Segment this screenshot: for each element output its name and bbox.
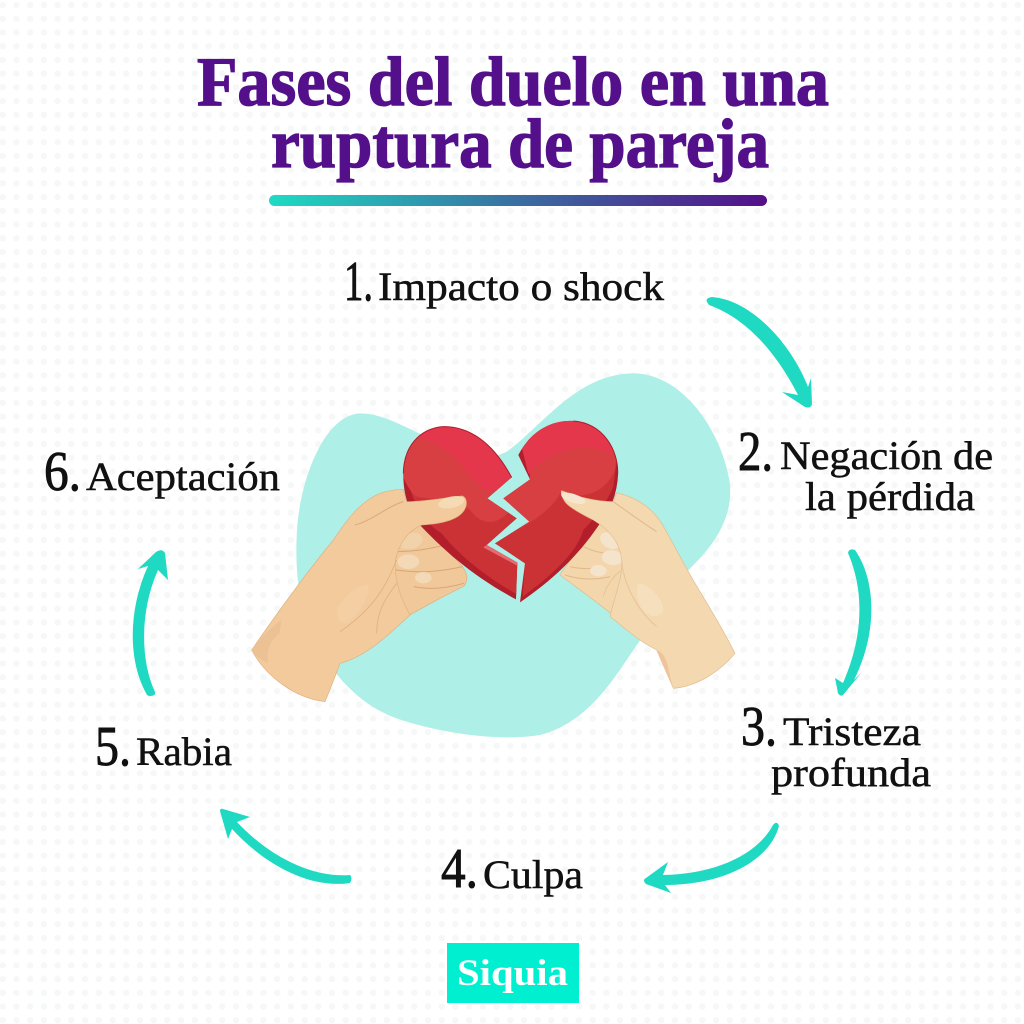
step 1: Impacto o shock [344,251,664,313]
left hand fingers behind heart [394,525,467,617]
step 1: Impacto o shock: 1. [344,251,373,313]
step 6: Aceptación: Aceptación [86,454,280,499]
step 2: Negación de la pérdida: la pérdida [805,474,975,519]
step 5: Rabia [95,716,232,778]
step 3: Tristeza profunda: 3. [741,696,777,758]
title underline [269,195,767,206]
step 6: Aceptación: 6. [44,441,81,503]
arrow 1 to 2 [707,297,812,408]
arrow 4 to 5 [220,809,352,884]
right hand palm and thumb [560,490,735,688]
logo: Siquia [447,943,579,1003]
right hand fingers behind heart [560,523,640,623]
arrow 2 to 3 [835,549,871,696]
step 3: Tristeza profunda [741,696,931,795]
left heart half [402,423,520,599]
title [197,44,829,183]
step 4: Culpa: 4. [441,838,478,900]
right heart half [495,420,620,602]
step 3: Tristeza profunda: profunda [771,750,931,795]
step 4: Culpa [441,838,583,900]
title: Fases del duelo en una [197,44,829,121]
teal blob [296,373,730,737]
logo: Siquia: Siquia [457,953,568,994]
step 6: Aceptación [44,441,280,503]
arrow 5 to 6 [133,550,168,696]
step 3: Tristeza profunda: Tristeza [783,709,921,754]
step 2: Negación de la pérdida: 2. [738,421,773,483]
step 1: Impacto o shock: Impacto o shock [378,264,664,309]
illustration: broken heart held by two hands [252,373,735,737]
step 2: Negación de la pérdida: Negación de [780,433,993,478]
arrow 3 to 4 [644,823,779,893]
left hand palm and thumb [252,489,466,702]
step 5: Rabia: 5. [95,716,131,778]
step 5: Rabia: Rabia [136,729,232,774]
step 2: Negación de la pérdida [738,421,993,519]
title: ruptura de pareja [271,106,769,183]
step 4: Culpa: Culpa [483,852,583,897]
